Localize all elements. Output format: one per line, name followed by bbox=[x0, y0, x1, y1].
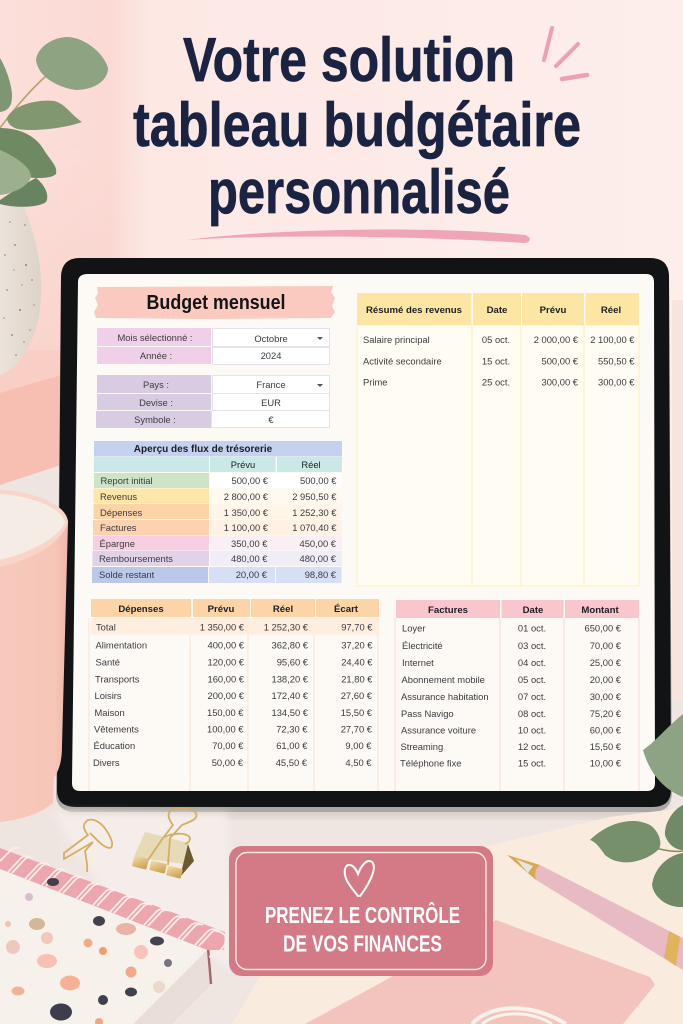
bills rows: 07 oct. bbox=[518, 691, 546, 702]
bills rows: Assurance voiture bbox=[401, 724, 476, 736]
call to action text: PRENEZ LE CONTRÔLE bbox=[265, 901, 460, 928]
bills rows bbox=[400, 622, 622, 768]
expenses rows: Vêtements bbox=[94, 724, 139, 734]
income rows: Prime bbox=[363, 376, 387, 388]
expenses rows: 95,60 € bbox=[277, 656, 309, 668]
callout: call to action badge bbox=[229, 846, 493, 976]
panel: month selection: 2024 bbox=[261, 350, 281, 361]
panel: country settings: Devise : bbox=[139, 397, 173, 408]
expenses total row: 97,70 € bbox=[341, 622, 373, 632]
expenses rows: 27,70 € bbox=[341, 724, 373, 734]
expenses rows: 27,60 € bbox=[341, 690, 373, 701]
income rows: 05 oct. bbox=[482, 334, 510, 345]
row: depenses bbox=[94, 504, 342, 519]
expenses rows: 160,00 € bbox=[208, 674, 245, 684]
row: revenus: 2 800,00 € bbox=[224, 491, 269, 502]
expenses rows: 50,00 € bbox=[212, 757, 244, 768]
expenses rows: Maison bbox=[94, 707, 125, 718]
row: solde restant: Solde restant bbox=[99, 569, 155, 580]
expenses rows: 138,20 € bbox=[272, 674, 309, 684]
row: revenus bbox=[94, 488, 342, 504]
eucalyptus leaves right bbox=[590, 714, 683, 907]
panel: country settings bbox=[96, 375, 330, 428]
panel: country settings: € bbox=[268, 414, 274, 425]
expenses rows: Transports bbox=[95, 674, 140, 684]
income rows: 25 oct. bbox=[482, 376, 510, 388]
row: report initial: Report initial bbox=[100, 475, 153, 486]
row: remboursements: Remboursements bbox=[99, 553, 173, 564]
panel: month selection bbox=[97, 328, 330, 364]
income rows: 2 000,00 € bbox=[534, 334, 579, 345]
panel: country settings: France bbox=[256, 379, 286, 390]
bills header bbox=[396, 600, 639, 618]
expenses rows: 362,80 € bbox=[272, 640, 309, 650]
row: remboursements bbox=[92, 551, 342, 566]
income rows: 300,00 € bbox=[598, 376, 635, 388]
cash flow column headers bbox=[94, 457, 342, 472]
row: report initial bbox=[94, 473, 342, 488]
desk paper bbox=[232, 808, 683, 1024]
bills rows: 25,00 € bbox=[590, 657, 622, 668]
expenses total row: 1 350,00 € bbox=[200, 622, 245, 632]
icon: heart bbox=[345, 861, 374, 896]
leaf: middle pointed bbox=[7, 101, 82, 130]
expenses header: Prévu bbox=[208, 604, 234, 615]
bills rows: Streaming bbox=[400, 741, 443, 752]
income rows: Activité secondaire bbox=[363, 356, 442, 366]
row: factures: 1 070,40 € bbox=[292, 522, 337, 533]
expenses rows: 37,20 € bbox=[341, 640, 373, 650]
icon: gold binder clip bbox=[132, 808, 197, 879]
expenses rows: 61,00 € bbox=[276, 740, 308, 751]
row: depenses: 1 252,30 € bbox=[292, 507, 337, 518]
vase bbox=[0, 203, 41, 375]
expenses rows: 24,40 € bbox=[341, 656, 373, 668]
icon: gold paper clip bbox=[64, 820, 112, 872]
expenses header: Réel bbox=[273, 604, 293, 615]
bills rows: 15 oct. bbox=[518, 758, 546, 768]
panel: month selection: Année : bbox=[140, 350, 172, 361]
coffee mug bbox=[0, 490, 68, 822]
expenses header: Écart bbox=[334, 603, 359, 615]
row: solde restant: 20,00 € bbox=[236, 569, 268, 580]
row: report initial: 500,00 € bbox=[300, 475, 337, 486]
leaf: large top bbox=[36, 37, 108, 90]
panel: month selection: Mois sélectionné : bbox=[117, 332, 193, 343]
income rows: 550,50 € bbox=[598, 356, 635, 366]
bills rows: Pass Navigo bbox=[401, 708, 454, 719]
bills rows: 70,00 € bbox=[590, 640, 622, 651]
expenses rows: 134,50 € bbox=[272, 707, 309, 718]
expenses rows: Divers bbox=[93, 757, 120, 768]
panel: country settings: Pays : bbox=[143, 379, 169, 390]
bills header: Date bbox=[523, 605, 543, 616]
income rows: 15 oct. bbox=[482, 356, 510, 366]
expenses rows: 45,50 € bbox=[276, 757, 308, 768]
bills rows: Internet bbox=[402, 657, 434, 668]
bills rows: 03 oct. bbox=[518, 640, 546, 651]
notebook spiral band bbox=[0, 848, 225, 950]
call to action text: DE VOS FINANCES bbox=[283, 930, 442, 956]
leaf: pale front bbox=[0, 150, 31, 195]
title: personnalisé bbox=[208, 158, 510, 227]
income rows bbox=[363, 334, 635, 388]
bills header: Factures bbox=[428, 605, 468, 616]
leaf: lower dark bbox=[0, 128, 56, 178]
bills rows: Abonnement mobile bbox=[402, 674, 485, 685]
row: epargne bbox=[93, 536, 342, 550]
cash flow title bbox=[94, 441, 342, 456]
heading: Budget mensuel: Budget mensuel bbox=[146, 292, 286, 314]
bills rows: 650,00 € bbox=[584, 622, 622, 634]
income rows: Salaire principal bbox=[363, 334, 430, 345]
bills rows: 20,00 € bbox=[590, 674, 622, 685]
row: revenus: Revenus bbox=[100, 491, 137, 502]
expenses rows: 9,00 € bbox=[345, 740, 372, 751]
row: epargne: 350,00 € bbox=[231, 538, 268, 549]
pen bbox=[507, 855, 683, 970]
income rows: 300,00 € bbox=[542, 376, 579, 388]
panel: income summary table bbox=[357, 293, 639, 586]
row: depenses: 1 350,00 € bbox=[224, 507, 269, 518]
cash flow title: Aperçu des flux de trésorerie bbox=[134, 444, 273, 455]
income table header: Date bbox=[487, 305, 507, 316]
bills rows: Loyer bbox=[402, 622, 425, 634]
row: report initial: 500,00 € bbox=[232, 475, 269, 486]
pale sheet under clips bbox=[52, 812, 262, 970]
panel: cash flow overview bbox=[92, 441, 342, 583]
expenses rows: 4,50 € bbox=[345, 757, 372, 768]
tablet frame bbox=[56, 258, 672, 812]
bills rows: Électricité bbox=[402, 640, 443, 651]
expenses total row: Total bbox=[96, 622, 116, 632]
expenses rows: 100,00 € bbox=[207, 724, 244, 734]
income table header: Prévu bbox=[540, 305, 566, 316]
panel: bills table bbox=[395, 600, 639, 791]
expenses rows: Loisirs bbox=[94, 690, 122, 701]
title bbox=[133, 26, 581, 227]
expenses rows bbox=[93, 640, 373, 768]
row: factures bbox=[93, 520, 342, 535]
bills rows: 04 oct. bbox=[518, 657, 546, 668]
expenses rows: 15,50 € bbox=[341, 707, 373, 718]
expenses rows: 120,00 € bbox=[208, 656, 245, 668]
expenses rows: 72,30 € bbox=[276, 724, 308, 734]
bills rows: 12 oct. bbox=[518, 741, 546, 752]
panel: month selection: Octobre bbox=[254, 333, 288, 344]
expenses total row bbox=[91, 618, 378, 634]
cash flow column headers: Prévu bbox=[231, 459, 255, 470]
call to action text bbox=[265, 901, 460, 956]
expenses rows: 150,00 € bbox=[207, 707, 244, 718]
tablet shadow bbox=[66, 802, 666, 818]
income table header bbox=[357, 293, 639, 325]
expenses rows: Santé bbox=[96, 656, 120, 668]
row: solde restant bbox=[92, 567, 342, 583]
expenses rows: 200,00 € bbox=[208, 690, 245, 701]
income rows: 500,00 € bbox=[542, 356, 579, 366]
panel: country settings: Symbole : bbox=[134, 414, 176, 425]
title: tableau budgétaire bbox=[133, 91, 581, 160]
notebook spine bbox=[208, 948, 211, 984]
notebook pages bbox=[133, 950, 211, 1024]
expenses rows: Alimentation bbox=[96, 640, 147, 650]
expenses rows: Éducation bbox=[94, 740, 135, 751]
income table header: Réel bbox=[601, 305, 621, 316]
row: factures: 1 100,00 € bbox=[224, 522, 269, 533]
leaf: lowest dark bbox=[0, 178, 47, 207]
plant: eucalyptus branch bbox=[0, 37, 108, 207]
expenses total row: 1 252,30 € bbox=[264, 622, 309, 632]
row: depenses: Dépenses bbox=[100, 507, 143, 518]
heading: Budget mensuel bbox=[94, 286, 335, 319]
expenses header bbox=[91, 599, 379, 617]
tablet screen bbox=[72, 274, 655, 791]
expenses rows: 172,40 € bbox=[272, 690, 309, 701]
bills rows: 10,00 € bbox=[590, 758, 622, 768]
bills rows: 05 oct. bbox=[518, 674, 546, 685]
notebook terrazzo dots bbox=[5, 878, 172, 1024]
notebook bbox=[0, 848, 226, 1024]
expenses rows: 21,80 € bbox=[341, 674, 373, 684]
row: factures: Factures bbox=[100, 522, 137, 533]
row: remboursements: 480,00 € bbox=[231, 553, 268, 564]
bills rows: 75,20 € bbox=[590, 708, 622, 719]
bills rows: 15,50 € bbox=[590, 741, 622, 752]
row: revenus: 2 950,50 € bbox=[292, 491, 337, 502]
title: Votre solution bbox=[183, 26, 515, 95]
row: epargne: Épargne bbox=[100, 538, 135, 549]
title underline brush stroke bbox=[187, 230, 530, 243]
row: remboursements: 480,00 € bbox=[300, 553, 337, 564]
cash flow column headers: Réel bbox=[301, 459, 321, 470]
income table header: Résumé des revenus bbox=[366, 305, 462, 316]
expenses rows: 70,00 € bbox=[212, 740, 244, 751]
row: epargne: 450,00 € bbox=[300, 538, 337, 549]
bills rows: Téléphone fixe bbox=[400, 758, 462, 768]
icon: sparkle strokes bbox=[544, 28, 587, 79]
bills rows: 60,00 € bbox=[590, 724, 622, 736]
notebook cover bbox=[0, 869, 207, 1024]
panel: expenses table bbox=[89, 599, 379, 791]
pink box under the vase bbox=[0, 350, 61, 485]
bills rows: Assurance habitation bbox=[401, 691, 489, 702]
expenses header: Dépenses bbox=[118, 604, 164, 615]
income rows: 2 100,00 € bbox=[590, 334, 635, 345]
expenses rows: 400,00 € bbox=[208, 640, 245, 650]
bills header: Montant bbox=[581, 605, 619, 616]
bills rows: 01 oct. bbox=[518, 622, 546, 634]
panel: country settings: EUR bbox=[261, 397, 281, 408]
row: solde restant: 98,80 € bbox=[305, 569, 337, 580]
leaf: left edge bbox=[0, 58, 12, 112]
tablet bezel bbox=[57, 258, 671, 807]
bills rows: 30,00 € bbox=[590, 691, 622, 702]
bills rows: 10 oct. bbox=[518, 724, 546, 736]
bills rows: 08 oct. bbox=[518, 708, 546, 719]
notebook spiral wires bbox=[0, 848, 226, 957]
tablet bbox=[56, 258, 672, 818]
